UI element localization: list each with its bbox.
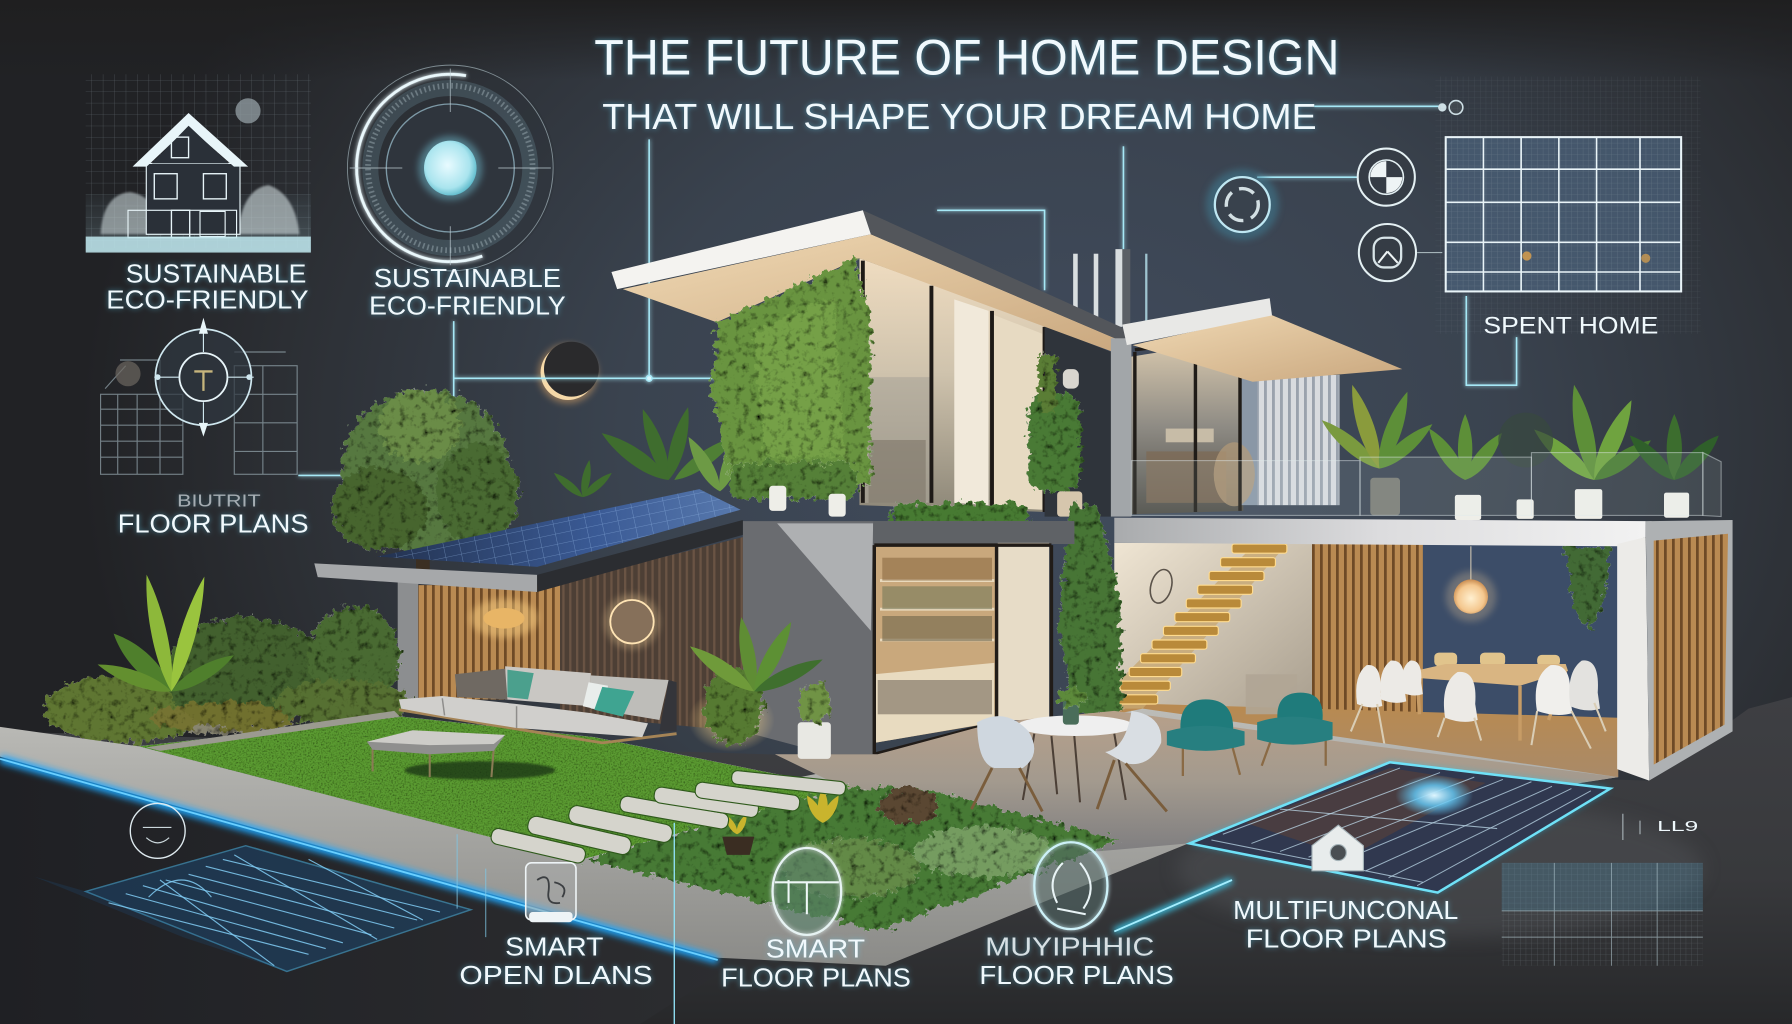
central concrete wall: [743, 521, 1074, 754]
label: floor plans left: BIUTRIT: [177, 490, 261, 510]
lawn: [138, 711, 851, 859]
icon: fan dial: [1358, 149, 1415, 206]
lower glass storefront: [874, 543, 1051, 754]
balcony plants: [731, 354, 1724, 535]
hologram: chart grid lower right: LL9: [1657, 819, 1698, 835]
left garden planting: [43, 573, 411, 743]
upper dark wall: [1045, 326, 1131, 517]
upper right glass room: [1111, 337, 1339, 517]
balcony slab: [1114, 518, 1646, 546]
hologram: left floor plan: [34, 803, 486, 971]
bistro table and chairs: [971, 687, 1167, 811]
green living wall: [711, 258, 871, 486]
vertical marker line: [673, 823, 675, 1024]
label: sustainable 2: SUSTAINABLE: [374, 263, 561, 293]
concrete platform and path: [0, 709, 1618, 966]
label: smart open plans: SMART: [505, 931, 603, 961]
label: sustainable 2: ECO-FRIENDLY: [369, 290, 566, 320]
lower wing interior under balcony: [1114, 543, 1619, 777]
label: smart floor plans: [721, 934, 911, 992]
ottoman: [367, 730, 505, 777]
teal lounge chairs: [1167, 693, 1333, 776]
label: multiphase floor plans: MUYIPHHIC: [985, 931, 1154, 961]
icon: smart floor plan circle: [773, 848, 841, 935]
label: spent home: SPENT HOME: [1483, 313, 1658, 340]
open staircase: [1114, 542, 1297, 714]
stepping stones: [490, 770, 846, 864]
label: smart open plans: [459, 931, 653, 990]
upper floor glass room: [859, 258, 1046, 512]
blue edge glow: [0, 759, 718, 960]
upper roof: [611, 210, 1126, 357]
lower roof right: [1122, 298, 1402, 382]
accent uplight and potted plant: [686, 616, 831, 759]
hologram: solar panel grid: [1435, 77, 1701, 334]
label: smart floor plans: SMART: [766, 934, 865, 964]
title: [594, 28, 1339, 137]
label: floor plans left: FLOOR PLANS: [118, 509, 309, 539]
label: multiphase floor plans: FLOOR PLANS: [979, 960, 1174, 990]
corner column and side wall: [1617, 520, 1733, 781]
title: THAT WILL SHAPE YOUR DREAM HOME: [602, 96, 1317, 137]
label: multifunctional floor plans: FLOOR PLANS: [1246, 923, 1447, 953]
icon: clock dial: [1359, 224, 1442, 281]
label: multifunctional floor plans: MULTIFUNCONAL: [1233, 895, 1458, 925]
icon: glowing smart gauge: [1206, 169, 1279, 240]
hologram: sensor ring: [330, 48, 570, 288]
solar roof: [314, 489, 743, 592]
icon: multiphase circle: [1034, 842, 1107, 929]
hanging vine: [1563, 546, 1611, 631]
label: multiphase floor plans: [979, 931, 1174, 990]
label: sustainable 1: [106, 258, 309, 315]
outdoor sofa: [399, 666, 677, 743]
tree: [331, 389, 519, 571]
label: sustainable 1: ECO-FRIENDLY: [106, 285, 309, 315]
label: sustainable 1: SUSTAINABLE: [126, 258, 306, 288]
roof vents: [1073, 249, 1147, 327]
label: multifunctional floor plans: [1233, 895, 1458, 953]
label: sustainable 2: [369, 263, 566, 320]
patio floor: [775, 711, 1618, 851]
eclipse sphere: [538, 342, 599, 403]
pendant lamp: [1446, 546, 1496, 622]
vine column: [1058, 505, 1122, 714]
label: smart open plans: OPEN DLANS: [459, 960, 653, 990]
glass railing: [1131, 453, 1721, 517]
hologram: chart grid lower right: [1502, 814, 1703, 966]
label: smart floor plans: FLOOR PLANS: [721, 962, 911, 992]
icon: house on plan: [1312, 825, 1363, 871]
hologram: house blueprint: [86, 74, 311, 253]
label: floor plans left: [118, 490, 309, 539]
glowing floor plan mat: [1190, 762, 1610, 893]
glowing accent line: [1114, 880, 1232, 931]
connector lines: [298, 106, 1517, 478]
wall light: [1063, 369, 1079, 389]
title: THE FUTURE OF HOME DESIGN: [594, 28, 1339, 85]
icon: smart tablet: [526, 863, 576, 922]
garden bed: [583, 786, 1120, 931]
hologram: compass over building sketch: [101, 318, 297, 474]
palms behind house: [551, 405, 748, 500]
dining set: [1351, 653, 1606, 749]
icon: smart sensor top right: [1439, 101, 1463, 114]
pergola wood wall: [398, 537, 743, 731]
